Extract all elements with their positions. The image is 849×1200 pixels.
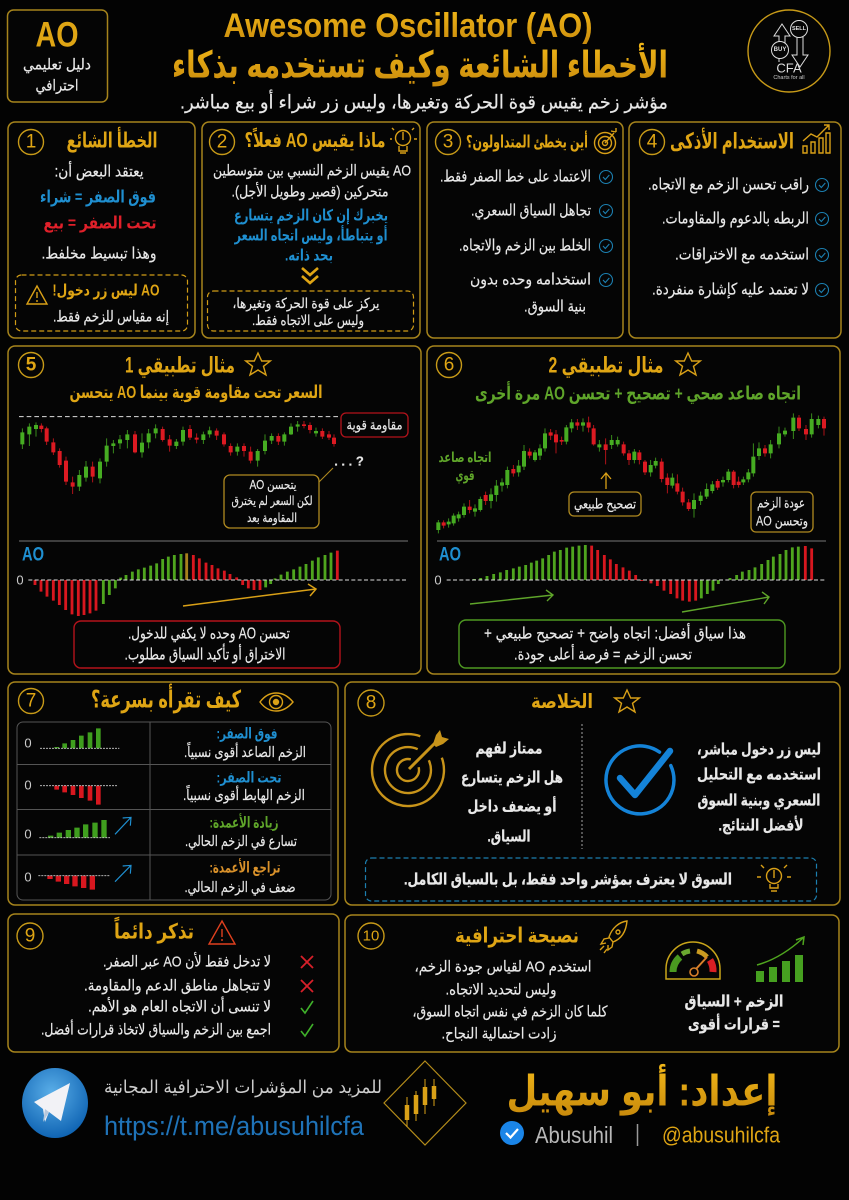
callout: AO improves: لكن السعر لم يخترق (232, 494, 312, 509)
list: smart usage: راقب تحسن الزخم مع الاتجاه. (648, 176, 809, 194)
list: reminders (41, 952, 313, 1038)
icon: rocket (600, 921, 627, 953)
zero labels: 0 (24, 870, 32, 884)
row: below zero: الزخم الهابط أقوى نسبياً. (183, 785, 305, 804)
heading 10: نصيحة احترافية (455, 924, 579, 948)
list: reminders: لا تتجاهل مناطق الدعم والمقاومة. (84, 978, 271, 994)
question mark: . . . ? (334, 454, 364, 468)
badge 5 (18, 352, 44, 378)
icon: star (615, 690, 639, 712)
callout: momentum returns: عودة الزخم (757, 496, 805, 512)
callout: not an entry button: AO ليس زر دخول! (52, 282, 160, 300)
badge 7 (18, 688, 44, 714)
list: trader mistakes: تجاهل السياق السعري. (471, 202, 591, 220)
link: telegram url: https://t.me/abusuhilcfa (104, 1111, 365, 1141)
text block: excellent for understanding: أو يضعف داخل (468, 796, 556, 816)
list: smart usage: الربطه بالدعوم والمقاومات. (662, 210, 809, 228)
callout: market context (366, 858, 816, 901)
text block: blue explanation (234, 208, 388, 264)
text block: excellent for understanding (461, 740, 563, 846)
mini bar charts (38, 728, 131, 890)
badge 8 (358, 690, 384, 716)
candlestick chart 2 (438, 413, 824, 533)
text block: mistake statements: وهذا تبسيط مخلفط. (42, 246, 156, 264)
icon: blue check (606, 746, 674, 814)
text block: pro tip: وليس لتحديد الاتجاه. (446, 982, 556, 998)
panel 3: where traders err (427, 122, 623, 338)
list: trader mistakes: الخلط بين الزخم والاتجاه. (459, 238, 591, 256)
text block: excellent for understanding: هل الزخم يتسارع (461, 770, 563, 786)
row: above zero: فوق الصفر: (216, 726, 278, 742)
panel 9: always remember (8, 914, 339, 1052)
list: reminders: لا تدخل فقط لأن AO عبر الصفر. (103, 952, 271, 970)
badge 2: 2 (217, 132, 227, 152)
text block: not a direct entry: لأفضل النتائج. (718, 816, 804, 834)
header badge: AO guide: دليل تعليمي (23, 56, 91, 74)
callout: not an entry button (16, 275, 188, 331)
icon: double chevron (302, 268, 318, 283)
text block: pro tip: استخدم AO لقياس جودة الزخم، (415, 958, 592, 976)
text block: mistake statements: فوق الصفر = شراء (40, 188, 156, 208)
row: above zero (184, 726, 306, 761)
table: reading guide (17, 722, 331, 900)
text block: mistake statements (40, 160, 156, 264)
zero label 2: 0 (434, 572, 442, 588)
row: below zero (183, 770, 305, 804)
row: bars retreating: تراجع الأعمدة: (210, 858, 280, 876)
header badge: AO guide: AO (36, 16, 78, 54)
AO histogram 2 (447, 545, 827, 602)
heading 3: أين يخطئ المتداولون؟ (466, 130, 588, 152)
text block: definition (213, 162, 411, 200)
icon: light bulb (390, 128, 417, 153)
text block: pro tip: كلما كان الزخم في نفس اتجاه السوق، (412, 1004, 608, 1022)
list: reminders: اجمع بين الزخم والسياق لاتخاذ قرارات أفضل. (41, 1020, 271, 1038)
list: trader mistakes: استخدامه وحده بدون (470, 272, 591, 290)
heading 8: الخلاصة (531, 691, 593, 713)
text block: momentum plus context (684, 994, 784, 1034)
author handles: Abusuhil (535, 1122, 613, 1148)
panel 7: how to read quickly (8, 682, 338, 905)
icon: gauge (666, 942, 720, 979)
icon: rising bars (756, 937, 804, 982)
callout: better context (459, 620, 785, 668)
badge 3: 3 (443, 132, 453, 152)
callout: AO improves (224, 468, 333, 528)
zero labels: 0 (24, 778, 32, 792)
text block: blue explanation: أو يتباطأ، وليس اتجاه السعر (234, 226, 388, 244)
subheading 5: السعر تحت مقاومة قوية بينما AO يتحسن (70, 382, 322, 403)
callout: better context: تحسن الزخم = فرصة أعلى جودة. (514, 644, 692, 664)
heading 1: الخطأ الشائع (66, 126, 158, 152)
icon: telegram (22, 1068, 88, 1138)
badge 9: 9 (25, 926, 35, 946)
label: strong uptrend (438, 449, 492, 485)
panel 6: example 2 (427, 346, 840, 674)
row: bars retreating: ضعف في الزخم الحالي. (184, 880, 296, 896)
author handles: @abusuhilcfa (662, 1122, 781, 1148)
label: AO chart 1: AO (22, 544, 44, 566)
icon: warning (209, 921, 235, 944)
icon: eye (260, 693, 293, 711)
icon: target with arrow (372, 730, 449, 806)
label: strong resistance: مقاومة قوية (346, 418, 402, 434)
title: الأخطاء الشائعة وكيف تستخدمه بذكاء (172, 42, 668, 86)
logo: CFA: SELL (792, 26, 807, 32)
panel 1: common mistake (8, 122, 195, 338)
badge 2 (210, 130, 234, 154)
text block: pro tip (412, 958, 608, 1042)
text block: not a direct entry: استخدمه مع التحليل (697, 766, 821, 784)
heading 6: مثال تطبيقي 2 (548, 352, 664, 378)
logo: CFA: BUY (774, 47, 786, 53)
icon: star (676, 353, 700, 375)
arrow: AO rising (183, 584, 316, 606)
icon: growth chart (803, 125, 830, 153)
label: AO chart 2: AO (439, 544, 461, 566)
icon: star (246, 353, 270, 375)
heading 4: الاستخدام الأذكى (670, 126, 794, 154)
heading 2: ماذا يقيس AO فعلاً؟ (245, 127, 386, 152)
author name: إعداد: أبو سهيل (506, 1064, 778, 1116)
callout: AO improves: المقاومة بعد (247, 511, 297, 526)
badge 7: 7 (26, 690, 36, 712)
badge 9 (17, 923, 43, 949)
heading 5: مثال تطبيقي 1 (125, 352, 235, 378)
list: smart usage (648, 176, 828, 300)
panel 10: pro tip (345, 915, 839, 1052)
list: reminders: لا تنسى أن الاتجاه العام هو الأهم. (88, 996, 271, 1016)
text block: definition: AO يقيس الزخم النسبي بين متوسطين (213, 162, 411, 180)
callout: better context: هذا سياق أفضل: اتجاه واضح + تصحيح طبيعي + (484, 622, 746, 644)
callout: AO alone not enough (74, 621, 340, 668)
row: bars rising: تسارع في الزخم الحالي. (185, 834, 297, 850)
text block: blue explanation: يخبرك إن كان الزخم يتسارع (234, 208, 388, 224)
label: strong uptrend: قوي (456, 467, 474, 485)
callout: focus on momentum: يركز على قوة الحركة وتغيرها، (232, 295, 380, 312)
logo: CFA: CFA (776, 60, 802, 76)
text block: not a direct entry (697, 742, 821, 834)
text block: blue explanation: بحد ذاته. (285, 248, 333, 264)
panel 2: what AO measures (202, 122, 420, 338)
callout: AO alone not enough: الاختراق أو تأكيد السياق مطلوب. (124, 644, 286, 664)
label: strong uptrend: اتجاه صاعد (438, 449, 492, 465)
logo: CFA (748, 10, 830, 92)
badge 4: 4 (647, 132, 658, 152)
text block: excellent for understanding: ممتاز لفهم (476, 740, 542, 758)
arrow: AO rising first leg (470, 590, 553, 604)
callout: momentum returns (751, 492, 813, 532)
author handles (500, 1121, 781, 1148)
callout: not an entry button: إنه مقياس للزخم فقط. (53, 308, 169, 326)
zero labels: 0 (24, 736, 32, 750)
panel 5: example 1 (8, 346, 421, 674)
text block: momentum plus context: = قرارات أقوى (688, 1014, 780, 1034)
panel 4: smart use (629, 122, 841, 338)
callout: focus on momentum: وليس على الاتجاه فقط. (252, 312, 364, 329)
title: Awesome Oscillator (AO) (224, 7, 592, 45)
text block: not a direct entry: السعري وبنية السوق (698, 792, 820, 810)
heading 9: تذكر دائماً (114, 916, 194, 944)
text block: excellent for understanding: السياق. (488, 828, 530, 846)
text block: definition: متحركين (قصير وطويل الأجل). (232, 182, 388, 200)
list: trader mistakes: الاعتماد على خط الصفر فقط. (440, 168, 591, 186)
zero labels (24, 736, 32, 884)
zero labels: 0 (24, 826, 32, 842)
row: bars retreating (184, 858, 296, 896)
badge 10 (358, 923, 384, 949)
text block: momentum plus context: الزخم + السياق (684, 994, 784, 1010)
badge 1: 1 (26, 132, 36, 152)
badge 6 (436, 352, 462, 378)
row: below zero: تحت الصفر: (216, 770, 282, 786)
badge 5: 5 (26, 354, 37, 376)
list: smart usage: لا تعتمد عليه كإشارة منفردة. (652, 282, 809, 300)
subtitle: مؤشر زخم يقيس قوة الحركة وتغيرها، وليس زر شراء أو بيع مباشر. (180, 90, 668, 114)
badge 6: 6 (444, 354, 454, 376)
callout: momentum returns: وتحسن AO (756, 514, 808, 530)
arrow: AO rising second leg (682, 592, 769, 612)
text: more free indicators: للمزيد من المؤشرات الاحترافية المجانية (104, 1077, 382, 1098)
badge 8: 8 (366, 692, 376, 714)
list: smart usage: استخدمه مع الاختراقات. (675, 246, 809, 264)
callout: AO improves: يتحسن AO (250, 478, 297, 493)
row: bars rising: زيادة الأعمدة: (210, 814, 278, 832)
header badge: AO guide (8, 10, 108, 102)
label: strong resistance (341, 413, 408, 437)
badge 1 (18, 130, 44, 154)
zero label 1: 0 (16, 572, 24, 588)
badge 4 (640, 130, 664, 154)
callout: market context: السوق لا يعترف بمؤشر واحد فقط، بل بالسياق الكامل. (404, 872, 732, 888)
badge 10: 10 (363, 928, 379, 944)
heading 7: كيف تقرأه بسرعة؟ (91, 684, 241, 714)
callout: focus on momentum (208, 291, 414, 331)
callout: AO alone not enough: تحسن AO وحده لا يكفي للدخول. (128, 626, 290, 644)
badge 3 (436, 130, 460, 154)
AO histogram 1 (28, 551, 408, 616)
title (172, 7, 668, 86)
icon: verified badge (500, 1121, 524, 1145)
list: trader mistakes (440, 168, 612, 316)
callout: natural correction: تصحيح طبيعي (574, 496, 636, 512)
header badge: AO guide: احترافي (36, 78, 78, 96)
text block: mistake statements: تحت الصفر = بيع (44, 214, 156, 234)
list: trader mistakes: بنية السوق. (524, 298, 586, 316)
candlestick chart 1 (19, 417, 352, 494)
icon: target (594, 128, 616, 154)
row: above zero: الزخم الصاعد أقوى نسبياً. (184, 742, 306, 761)
arrow: correction pointer (601, 473, 611, 489)
text block: pro tip: زادت احتمالية النجاح. (442, 1026, 556, 1042)
panel 8: summary (345, 682, 840, 905)
icon: candle diamond (384, 1061, 466, 1145)
row: bars rising (185, 814, 297, 850)
text block: mistake statements: يعتقد البعض أن: (54, 160, 144, 180)
callout: natural correction (569, 492, 641, 516)
logo: CFA: Charts for all (773, 75, 805, 81)
